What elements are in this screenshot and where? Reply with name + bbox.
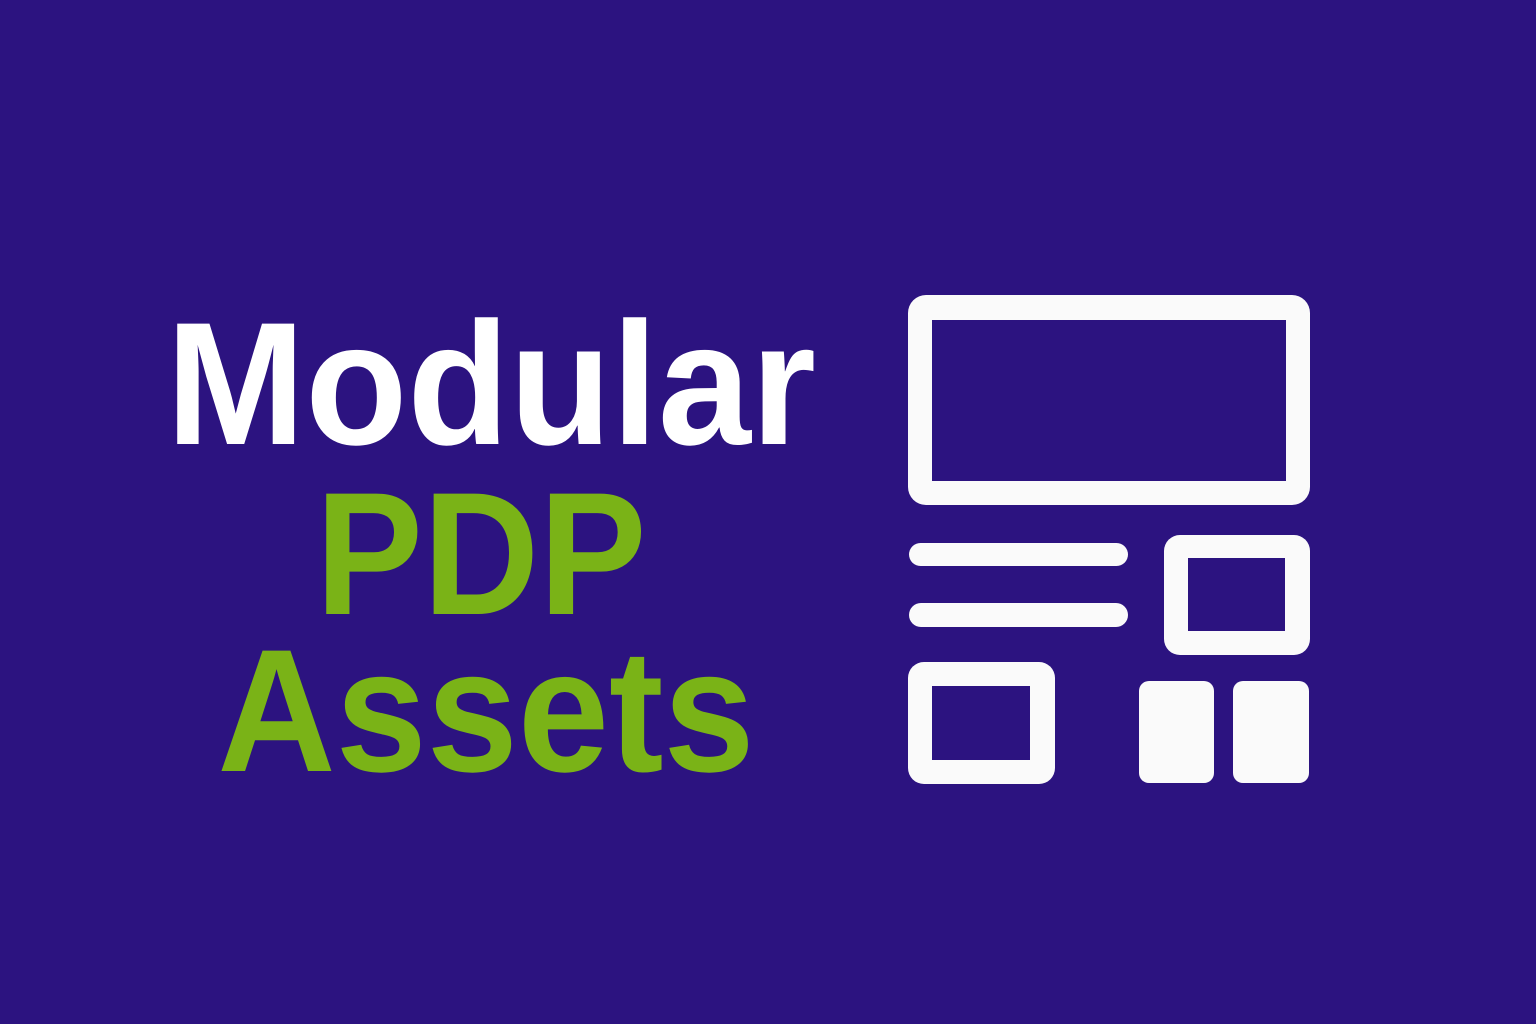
heading line: Assets: Assets bbox=[217, 614, 755, 809]
icon part: filled tiles bbox=[1139, 681, 1309, 783]
heading line: PDP: PDP bbox=[315, 457, 647, 652]
icon part: small image block left bbox=[908, 662, 1055, 784]
icon part: small image block right bbox=[1164, 535, 1310, 655]
title: Modular PDP Assets bbox=[166, 287, 816, 809]
icon part: hero image block bbox=[908, 295, 1310, 505]
heading line: Modular: Modular bbox=[166, 287, 816, 482]
icon part: text lines bbox=[909, 543, 1128, 627]
